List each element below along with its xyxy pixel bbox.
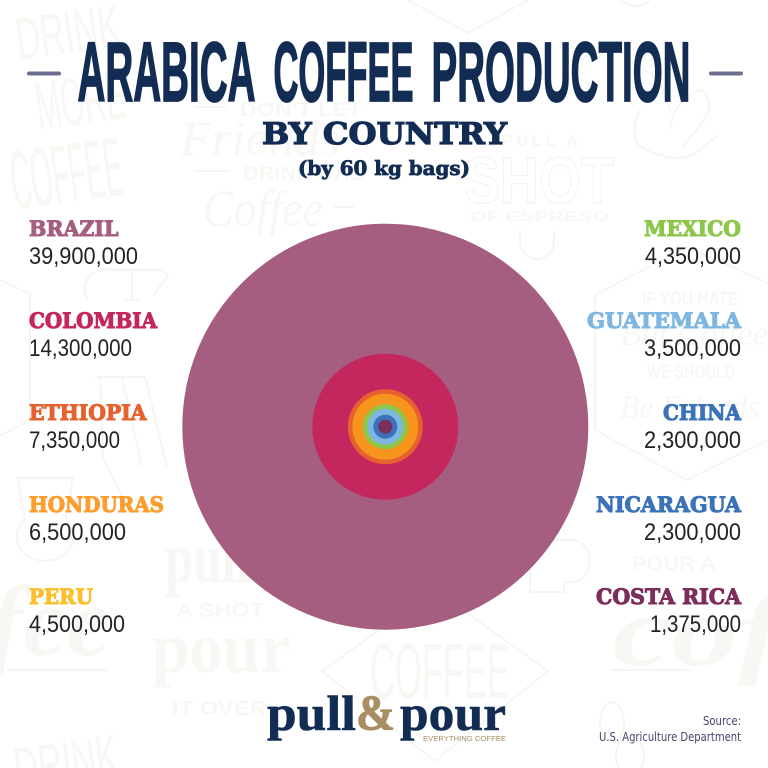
label: Mexico: 4,350,000 (645, 243, 741, 270)
label: Honduras: HONDURAS (29, 492, 164, 517)
label: Guatemala: 3,500,000 (644, 335, 741, 362)
background watermark pattern: Coffee (203, 181, 323, 238)
background watermark pattern: pull (165, 518, 250, 598)
label: China (644, 400, 742, 454)
logo: pull & pour: & (356, 684, 395, 740)
background watermark pattern: Friends (179, 110, 340, 166)
label: Honduras (29, 492, 164, 546)
label: Costa Rica: 1,375,000 (650, 611, 741, 638)
background watermark pattern: PULL A (502, 133, 578, 150)
background watermark pattern: pour (152, 608, 290, 688)
label: Ethiopia: ETHIOPIA (29, 400, 147, 425)
background watermark pattern: IF YOU HATE (642, 289, 738, 310)
label: Guatemala (587, 308, 742, 362)
logo: pull & pour: pour (400, 685, 506, 741)
label: Mexico: MEXICO (644, 216, 741, 241)
title: COFFEE (274, 25, 414, 119)
background watermark pattern: COFFEE (370, 627, 510, 715)
source note: U.S. Agriculture Department (599, 730, 741, 744)
label: Ethiopia (29, 400, 147, 454)
logo: pull & pour: pull (267, 685, 356, 741)
label: Brazil (29, 216, 138, 270)
label: Nicaragua: 2,300,000 (644, 519, 741, 546)
source note: Source: (703, 714, 741, 728)
logo: pull & pour (267, 684, 506, 743)
label: Nicaragua (596, 492, 742, 546)
subtitle: BY COUNTRY (262, 117, 508, 152)
background watermark pattern: A SHOT (176, 600, 264, 622)
label: Colombia (29, 308, 158, 362)
label: Colombia: COLOMBIA (29, 308, 158, 333)
background watermark pattern: IT OVER (172, 698, 268, 720)
background watermark pattern: But Coffee (620, 316, 768, 353)
background watermark pattern: DON'T LET (240, 100, 362, 121)
label: Brazil: BRAZIL (29, 216, 119, 241)
label: Guatemala: GUATEMALA (587, 308, 742, 333)
label: Peru: PERU (29, 584, 93, 609)
title decoration: right dash (709, 72, 743, 76)
label: Mexico (644, 216, 741, 270)
background watermark pattern: MORE (31, 57, 130, 145)
unit note: (by 60 kg bags) (298, 156, 470, 180)
title (78, 25, 690, 119)
nested circle chart (182, 224, 588, 630)
label: Costa Rica (596, 584, 742, 638)
title: ARABICA (78, 25, 256, 119)
logo: pull & pour: EVERYTHING COFFEE (423, 734, 506, 743)
source note (599, 714, 741, 744)
background watermark pattern: COFFEE (4, 119, 128, 228)
title decoration: left dash (27, 72, 61, 76)
label: Peru (29, 584, 125, 638)
label: Ethiopia: 7,350,000 (29, 427, 120, 454)
label: Colombia: 14,300,000 (29, 335, 132, 362)
label: Honduras: 6,500,000 (29, 519, 126, 546)
background watermark pattern: Be Friends (620, 389, 760, 426)
background watermark pattern: SHOT (464, 143, 614, 217)
background watermark pattern: DRINK BAD (243, 164, 365, 185)
label: Brazil: 39,900,000 (29, 243, 138, 270)
label: Costa Rica: COSTA RICA (596, 584, 742, 609)
background watermark pattern: POUR A (632, 554, 716, 575)
label: Nicaragua: NICARAGUA (596, 492, 742, 517)
background watermark pattern: cof (612, 576, 768, 687)
label: Peru: 4,500,000 (29, 611, 125, 638)
label: China: 2,300,000 (644, 427, 741, 454)
label: China: CHINA (663, 400, 742, 425)
background watermark pattern: OF ESPRESO (470, 208, 609, 224)
background watermark pattern: WE SHOULD (647, 362, 735, 383)
